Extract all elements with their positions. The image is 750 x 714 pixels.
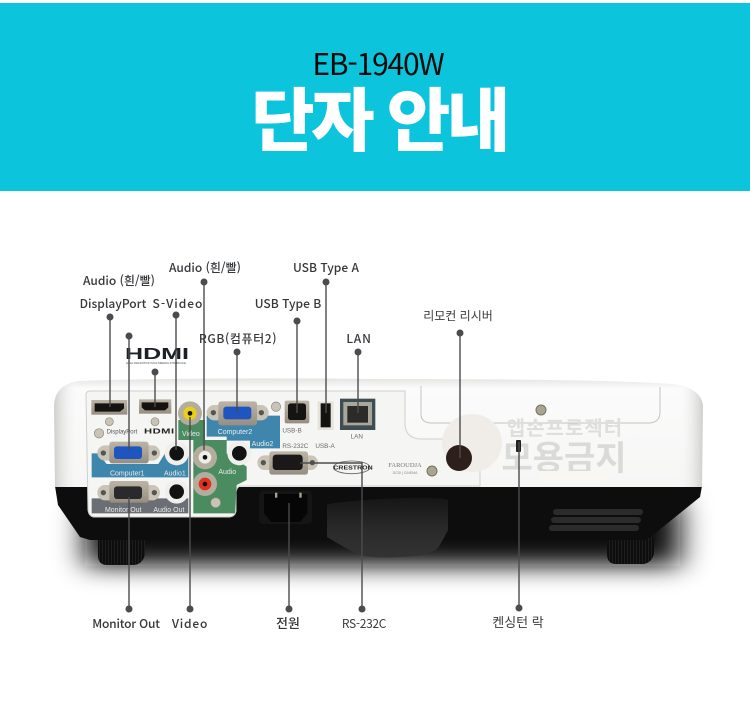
watermark: 모용금지 bbox=[501, 431, 627, 480]
crestron logo: CRESTRON bbox=[333, 465, 373, 471]
port labels: Audio (흰/빨) bbox=[169, 259, 241, 276]
projector photo bbox=[54, 378, 703, 565]
right foot bbox=[607, 537, 654, 564]
panel text: LAN bbox=[351, 434, 363, 441]
watermark: 엡손프로젝터 bbox=[507, 412, 623, 441]
panel text: RS-232C bbox=[282, 443, 309, 450]
panel text: Audio Out bbox=[153, 507, 184, 514]
hdmi bbox=[139, 399, 171, 414]
rear cover outline bbox=[421, 386, 660, 423]
port labels: USB Type B bbox=[255, 295, 321, 312]
panel text: Computer2 bbox=[218, 429, 252, 436]
faroudja logo bbox=[388, 462, 422, 475]
monitor out port bbox=[97, 485, 160, 500]
leader lines bbox=[110, 282, 519, 609]
panel details: HDMI bbox=[144, 426, 175, 435]
lan bbox=[340, 399, 375, 430]
port labels: 켄싱턴 락 bbox=[492, 612, 544, 631]
white body bbox=[54, 378, 703, 487]
lens bulge bbox=[327, 498, 448, 558]
panel text bbox=[105, 428, 363, 514]
serial label bbox=[540, 471, 606, 484]
port labels: RGB(컴퓨터2) bbox=[199, 330, 277, 347]
power inlet bbox=[259, 491, 312, 524]
displayport bbox=[91, 400, 127, 415]
audio2 bbox=[227, 441, 251, 465]
screw on cover bbox=[536, 405, 546, 415]
audio R rca bbox=[193, 472, 217, 496]
panel text: Audio2 bbox=[252, 441, 274, 448]
panel screws bbox=[94, 402, 281, 508]
port labels: Audio (흰/빨) bbox=[83, 272, 155, 289]
projector shadow bbox=[85, 500, 680, 566]
hdmi logo bbox=[125, 346, 189, 365]
port labels: S-Video bbox=[153, 295, 203, 312]
usb-b bbox=[285, 401, 309, 423]
port labels bbox=[80, 259, 544, 632]
computer2 port bbox=[207, 405, 269, 420]
faroudja logo: DCDi | CINEMA bbox=[393, 471, 418, 475]
panel text: Video bbox=[182, 431, 200, 438]
panel text: Audio1 bbox=[164, 470, 186, 477]
header banner bbox=[0, 3, 750, 191]
audio out bbox=[165, 480, 189, 504]
port labels: RS-232C bbox=[342, 615, 387, 632]
usb-a bbox=[318, 401, 334, 430]
panel text: USB-A bbox=[315, 443, 335, 450]
leader dots bbox=[106, 278, 522, 612]
color strips bbox=[92, 453, 188, 477]
port labels: Video bbox=[171, 615, 208, 632]
audio L rca bbox=[193, 445, 217, 469]
model name: EB-1940W bbox=[312, 40, 444, 84]
vent slots bbox=[549, 509, 643, 531]
computer1 port bbox=[97, 445, 160, 461]
port labels: LAN bbox=[346, 330, 372, 347]
remote receiver bbox=[446, 445, 472, 471]
port labels: 전원 bbox=[276, 613, 300, 632]
port labels: 리모컨 리시버 bbox=[423, 307, 493, 324]
panel text: Audio bbox=[218, 469, 236, 476]
rs-232c port bbox=[257, 455, 318, 470]
panel text: Computer1 bbox=[110, 470, 145, 477]
kensington lock bbox=[516, 440, 521, 452]
port labels: DisplayPort bbox=[80, 295, 147, 312]
screw bbox=[427, 466, 437, 476]
panel text: Monitor Out bbox=[105, 507, 142, 514]
left foot bbox=[98, 538, 145, 565]
panel text: USB-B bbox=[282, 428, 302, 435]
connector panel bbox=[86, 391, 480, 517]
hdmi logo: HDMI bbox=[125, 346, 189, 363]
watermark bbox=[442, 412, 627, 480]
port labels: Monitor Out bbox=[92, 615, 160, 632]
faroudja logo: FAROUDJA bbox=[388, 462, 422, 469]
panel labels: DisplayPort bbox=[107, 429, 138, 435]
port labels: USB Type A bbox=[293, 259, 360, 276]
audio1 bbox=[165, 441, 189, 465]
hdmi logo: HIGH DEFINITION MULTIMEDIA INTERFACE bbox=[126, 361, 186, 365]
video rca bbox=[178, 401, 202, 425]
panel details bbox=[91, 399, 375, 524]
crestron logo bbox=[333, 461, 373, 474]
black base bbox=[55, 486, 702, 540]
title: 단자 안내 bbox=[251, 65, 507, 165]
